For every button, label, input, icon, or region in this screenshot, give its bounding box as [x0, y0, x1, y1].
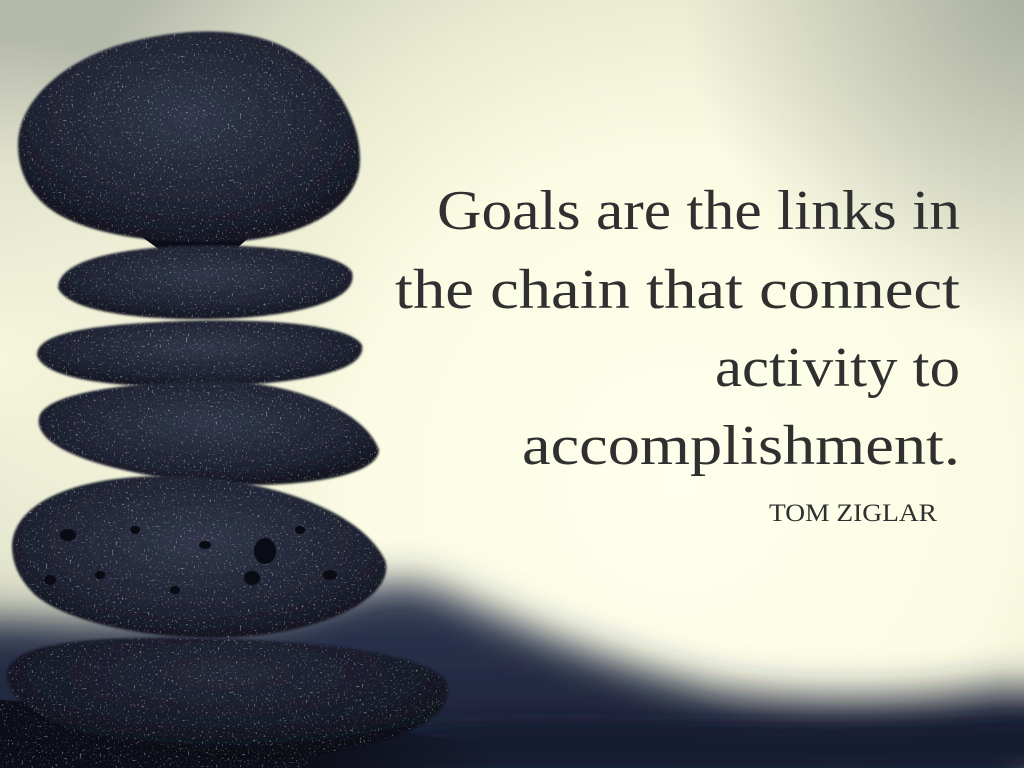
stone 1 top — [18, 31, 360, 242]
background left glow — [0, 40, 320, 680]
quote — [395, 180, 961, 477]
quote line 2: the chain that connect — [395, 259, 961, 321]
stone pores — [44, 526, 337, 594]
stone 6 bottom — [7, 638, 448, 756]
stone 3 — [37, 320, 362, 387]
stone base shadow — [0, 700, 500, 768]
blurred dark hill — [0, 583, 1024, 768]
stone neck shadow — [135, 232, 255, 250]
stone 2 — [58, 245, 353, 319]
stone 4 — [39, 381, 379, 485]
stone 5 — [12, 476, 386, 638]
stone stack — [0, 30, 448, 768]
dark foreground ground — [0, 717, 1024, 768]
attribution: TOM ZIGLAR — [769, 500, 937, 527]
quote line 3: activity to — [715, 337, 960, 399]
quote line 4: accomplishment. — [522, 415, 960, 477]
quote line 1: Goals are the links in — [437, 180, 960, 242]
stone speckle texture — [0, 20, 460, 768]
background corner shade — [684, 0, 1024, 340]
